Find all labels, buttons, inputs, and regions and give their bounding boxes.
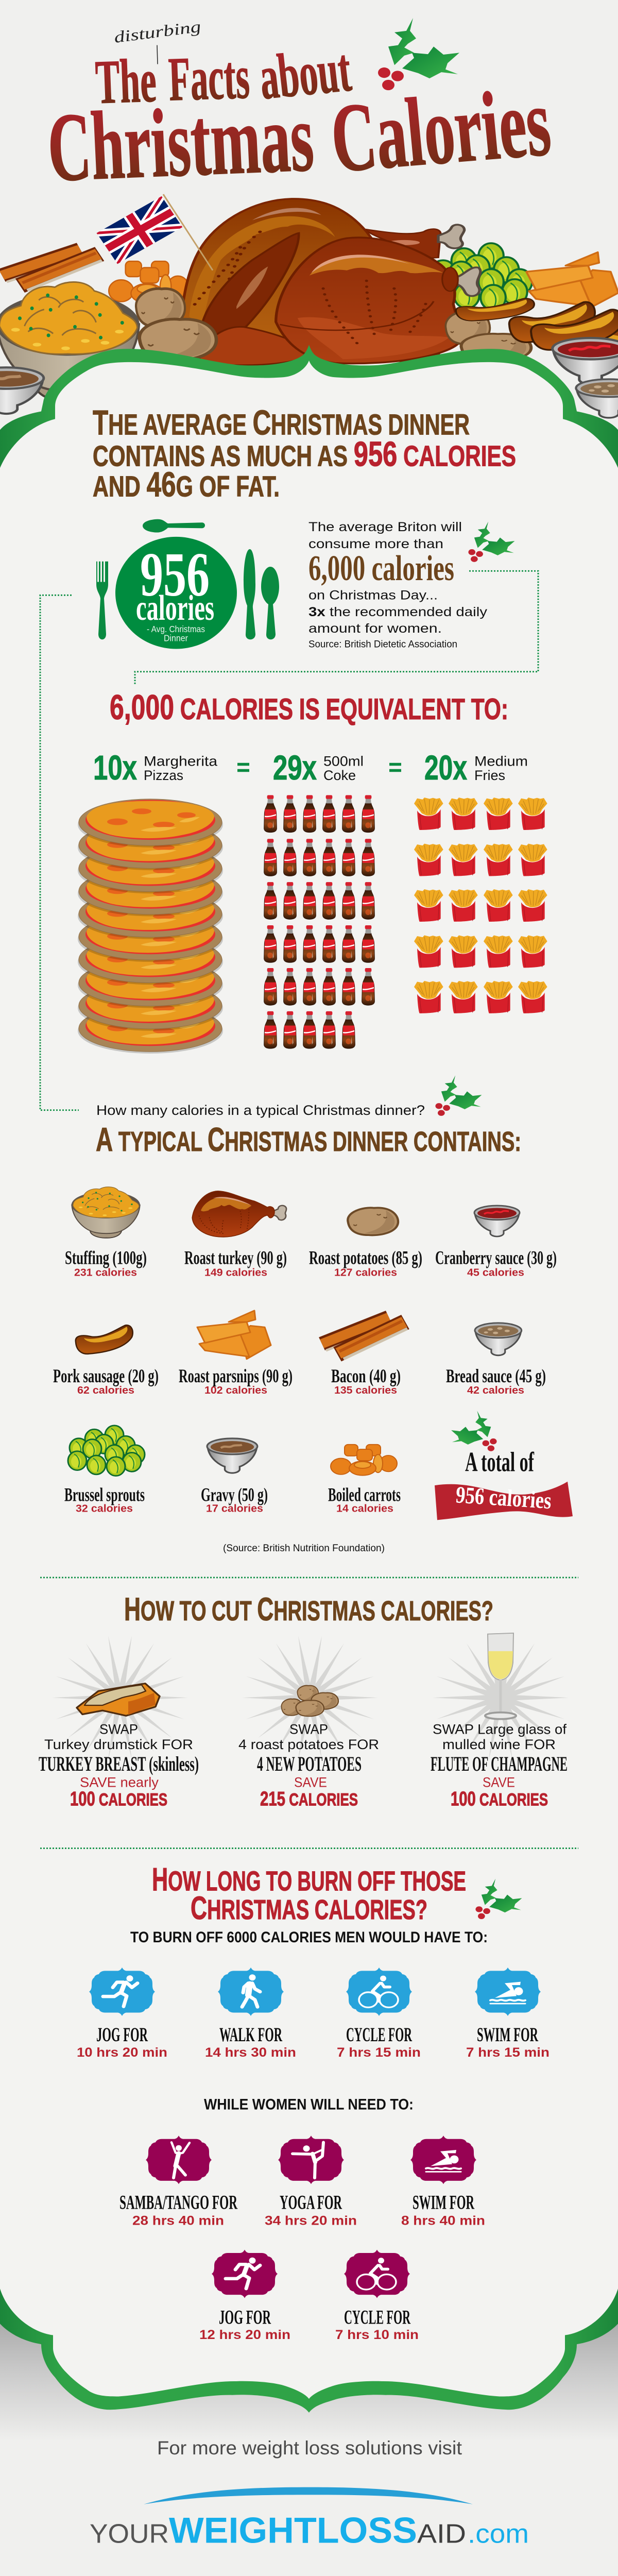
- food grid: [53, 1187, 557, 1515]
- plate caption: - Avg. Christmas: [147, 624, 205, 634]
- title line 1: about: [256, 36, 354, 112]
- item: boiled carrots: Boiled carrots: [328, 1485, 401, 1505]
- activity: samba: [119, 2136, 238, 2228]
- panel: swap turkey: SAVE nearly: [80, 1775, 159, 1790]
- activity: cycle: CYCLE FOR: [344, 2306, 411, 2328]
- heading: burn off: CHRISTMAS CALORIES?: [191, 1890, 427, 1926]
- activity: swim: 8 hrs 40 min: [401, 2213, 485, 2228]
- item: stuffing: [65, 1187, 147, 1278]
- heading: average Christmas dinner: [93, 403, 516, 504]
- logo: your weight loss aid: [90, 2487, 529, 2551]
- logo arc: [144, 2487, 473, 2504]
- item: bacon: Bacon (40 g): [331, 1366, 401, 1387]
- panel: swap potatoes: SWAP: [289, 1721, 328, 1737]
- panel: swap potatoes: 4 roast potatoes FOR: [238, 1737, 379, 1752]
- icon: fork: [96, 562, 108, 639]
- item: brussel sprouts: 32 calories: [76, 1503, 133, 1515]
- plate unit: calories: [136, 588, 214, 628]
- equivalence row: Medium: [474, 753, 528, 769]
- activity: walk: [205, 1968, 296, 2060]
- item: roast potatoes: 127 calories: [334, 1267, 397, 1278]
- ribbon text: 956 calories: [455, 1482, 553, 1514]
- item: gravy: [201, 1438, 268, 1515]
- heading line 3: AND 46G OF FAT.: [93, 465, 280, 504]
- item: pork sausage: [53, 1325, 159, 1396]
- item: stuffing: Stuffing (100g): [65, 1248, 147, 1268]
- item: brussel sprouts: Brussel sprouts: [64, 1485, 145, 1505]
- logo wordmark: .com: [468, 2519, 529, 2549]
- icon: holly burn: [475, 1879, 522, 1919]
- equivalence row: Pizzas: [144, 768, 183, 783]
- panel: swap turkey: TURKEY BREAST (skinless): [39, 1753, 199, 1776]
- panel: swap wine: mulled wine FOR: [442, 1737, 556, 1752]
- logo wordmark: YOUR: [90, 2519, 169, 2549]
- icon: spoon: [261, 567, 279, 639]
- activity: samba: SAMBA/TANGO FOR: [119, 2191, 238, 2213]
- panel: swap potatoes: 4 NEW POTATOES: [257, 1753, 362, 1776]
- item: gravy: 17 calories: [206, 1503, 263, 1515]
- activity: cycle: [337, 1968, 421, 2060]
- dotted connector right: [135, 571, 538, 685]
- title line 1: Facts: [167, 43, 251, 114]
- activity: jog: JOG FOR: [219, 2306, 271, 2328]
- source note: (Source: British Nutrition Foundation): [223, 1543, 385, 1554]
- activity: walk: WALK FOR: [219, 2023, 283, 2045]
- plate graphic: 956 calories: Dinner: [164, 633, 188, 643]
- pizza stack: [78, 799, 223, 1054]
- item: boiled carrots: 14 calories: [336, 1503, 393, 1515]
- item: roast parsnips: [179, 1311, 293, 1396]
- heading line 1: THE AVERAGE CHRISTMAS DINNER: [93, 403, 470, 442]
- item: pork sausage: 62 calories: [77, 1385, 134, 1396]
- plate graphic: 956 calories: [96, 519, 279, 649]
- footer text: For more weight loss solutions visit: [157, 2437, 462, 2459]
- panel: swap wine: SWAP Large glass of: [433, 1721, 566, 1737]
- panel: white card: [0, 361, 618, 2399]
- activity: swim: 7 hrs 15 min: [466, 2045, 550, 2060]
- title line 1: The: [94, 46, 158, 117]
- activity: cycle: 7 hrs 15 min: [337, 2045, 421, 2060]
- total ribbon: [435, 1482, 573, 1520]
- panel: swap turkey: [39, 1635, 199, 1810]
- activity: samba: 28 hrs 40 min: [132, 2213, 224, 2228]
- sprouts: [428, 243, 532, 310]
- item: gravy: Gravy (50 g): [201, 1485, 268, 1505]
- item: roast turkey: [184, 1191, 287, 1278]
- icon: knife: [244, 549, 255, 639]
- equivalence row: Fries: [474, 768, 505, 783]
- item: pork sausage: Pork sausage (20 g): [53, 1366, 159, 1387]
- panel: men activities: [77, 1968, 550, 2060]
- item: brussel sprouts: [64, 1426, 145, 1515]
- icon: burst: [242, 1635, 378, 1760]
- activity: swim: SWIM FOR: [413, 2191, 475, 2213]
- text block: average Briton: [308, 519, 487, 650]
- icon: holly total: [451, 1411, 497, 1451]
- gravy bowl left: [0, 367, 44, 414]
- item: roast potatoes: Roast potatoes (85 g): [309, 1248, 422, 1268]
- heading: burn off: [152, 1861, 466, 1926]
- activity: swim: SWIM FOR: [477, 2023, 539, 2045]
- equivalence row: [93, 749, 528, 787]
- item: cranberry sauce: [435, 1206, 557, 1278]
- equals second: [389, 763, 401, 772]
- bacon: [2, 249, 102, 290]
- carrots: [109, 261, 188, 303]
- dotted connector left: [40, 595, 79, 1110]
- icon: new potatoes: [281, 1686, 338, 1716]
- panel: swap wine: 100 CALORIES: [451, 1787, 548, 1810]
- activity: cycle: [335, 2250, 419, 2342]
- icon: turkey breast: [77, 1684, 160, 1716]
- text block: average Briton: on Christmas Day...: [308, 588, 438, 602]
- activity: yoga: [265, 2136, 357, 2228]
- panel: swap potatoes: 215 CALORIES: [260, 1787, 358, 1810]
- activity: swim: [466, 1968, 550, 2060]
- 20x fries: 20x: [424, 749, 467, 787]
- circle plate: [115, 537, 237, 649]
- stuffing bowl: [0, 282, 140, 401]
- panel: swap turkey: Turkey drumstick FOR: [44, 1737, 193, 1752]
- annotation: disturbing: disturbing: [113, 18, 202, 47]
- icon: burst: [433, 1635, 569, 1760]
- union jack flag: [97, 194, 213, 270]
- item: bread sauce: 42 calories: [467, 1385, 524, 1396]
- item: roast potatoes: [309, 1208, 422, 1278]
- activity: walk: 14 hrs 30 min: [205, 2045, 296, 2060]
- equivalence row: Margherita: [144, 753, 218, 769]
- fries boxes: [414, 798, 547, 1013]
- panel: swap turkey: 100 CALORIES: [70, 1787, 167, 1810]
- text block: average Briton: consume more than: [308, 536, 443, 551]
- shadow below frame: [0, 2318, 618, 2442]
- item: roast turkey: Roast turkey (90 g): [184, 1248, 287, 1268]
- text block: average Briton: 3x the recommended daily: [308, 604, 487, 619]
- panel: women activities: [119, 2136, 485, 2342]
- activity: cycle: CYCLE FOR: [346, 2023, 413, 2045]
- parsnips: [526, 252, 618, 309]
- item: stuffing: 231 calories: [74, 1267, 137, 1278]
- question text: How many calories in a typical Christmas dinner?: [96, 1103, 425, 1118]
- item: bacon: 135 calories: [334, 1385, 397, 1396]
- icon: dessert spoon: [143, 519, 205, 533]
- text block: average Briton: The average Briton will: [308, 519, 462, 534]
- activity: jog: JOG FOR: [96, 2023, 148, 2045]
- total callout: [435, 1411, 573, 1520]
- equals: [237, 763, 249, 772]
- activity: jog: 12 hrs 20 min: [199, 2327, 290, 2342]
- roast turkey: [179, 199, 480, 365]
- panel: swap wine: [431, 1633, 569, 1810]
- activity: jog: [77, 1968, 167, 2060]
- gravy bowl right: [576, 379, 618, 418]
- item: bread sauce: Bread sauce (45 g): [446, 1366, 546, 1387]
- logo wordmark: AID: [417, 2519, 466, 2549]
- activity: yoga: 34 hrs 20 min: [265, 2213, 357, 2228]
- icon: holly question: [435, 1075, 482, 1116]
- text block: average Briton: amount for women.: [308, 621, 442, 636]
- item: bacon: [322, 1317, 407, 1396]
- icon: burst: [52, 1635, 188, 1760]
- activity: jog: [199, 2250, 290, 2342]
- logo wordmark: WEIGHTLOSS: [169, 2511, 417, 2551]
- coke bottles: [264, 795, 374, 1048]
- icon: large holly: [378, 18, 459, 90]
- panel: swap turkey: SWAP: [99, 1721, 138, 1737]
- heading: how to cut: HOW TO CUT CHRISTMAS CALORIES?: [124, 1591, 493, 1627]
- equivalence row: 500ml: [323, 753, 364, 769]
- item: roast parsnips: Roast parsnips (90 g): [179, 1366, 293, 1387]
- subheading: men: TO BURN OFF 6000 CALORIES MEN WOULD HAVE TO:: [130, 1928, 488, 1946]
- activity: cycle: 7 hrs 10 min: [335, 2327, 419, 2342]
- panel: swap potatoes: SAVE: [294, 1775, 327, 1790]
- title: [45, 18, 555, 202]
- icon: champagne flute: [485, 1633, 516, 1719]
- activity: jog: 10 hrs 20 min: [77, 2045, 167, 2060]
- sausages: [551, 314, 618, 354]
- activity: yoga: YOGA FOR: [280, 2191, 342, 2213]
- icon: small holly: [468, 521, 514, 562]
- 29x coke: 29x: [273, 749, 317, 787]
- item: boiled carrots: [328, 1445, 401, 1515]
- roast potatoes: [136, 289, 185, 327]
- plate number: 956: [140, 540, 210, 609]
- panel: swap wine: SAVE: [483, 1775, 515, 1790]
- item: roast turkey: 149 calories: [204, 1267, 267, 1278]
- subheading: women: WHILE WOMEN WILL NEED TO:: [204, 2096, 414, 2113]
- cranberry sauce bowl: [553, 338, 618, 384]
- activity: swim: [401, 2136, 485, 2228]
- stat: 6,000 calories: 6,000 calories: [308, 548, 454, 588]
- caret line: [157, 45, 158, 64]
- equivalence row: Coke: [323, 768, 356, 783]
- item: roast parsnips: 102 calories: [204, 1385, 267, 1396]
- 10x pizzas: 10x: [93, 749, 137, 787]
- item: cranberry sauce: 45 calories: [467, 1267, 524, 1278]
- text block: average Briton: Source: British Dietetic Association: [308, 639, 457, 650]
- heading line 2: CONTAINS AS MUCH AS 956 CALORIES: [93, 434, 516, 473]
- item: bread sauce: [446, 1323, 546, 1396]
- title line 2: Christmas: [45, 83, 316, 202]
- panel: swap potatoes: [238, 1635, 379, 1810]
- hero: Christmas dinner illustration: [0, 194, 618, 418]
- total label: A total of: [465, 1447, 535, 1478]
- logo wordmark: [90, 2511, 529, 2551]
- title line 1: [94, 36, 354, 117]
